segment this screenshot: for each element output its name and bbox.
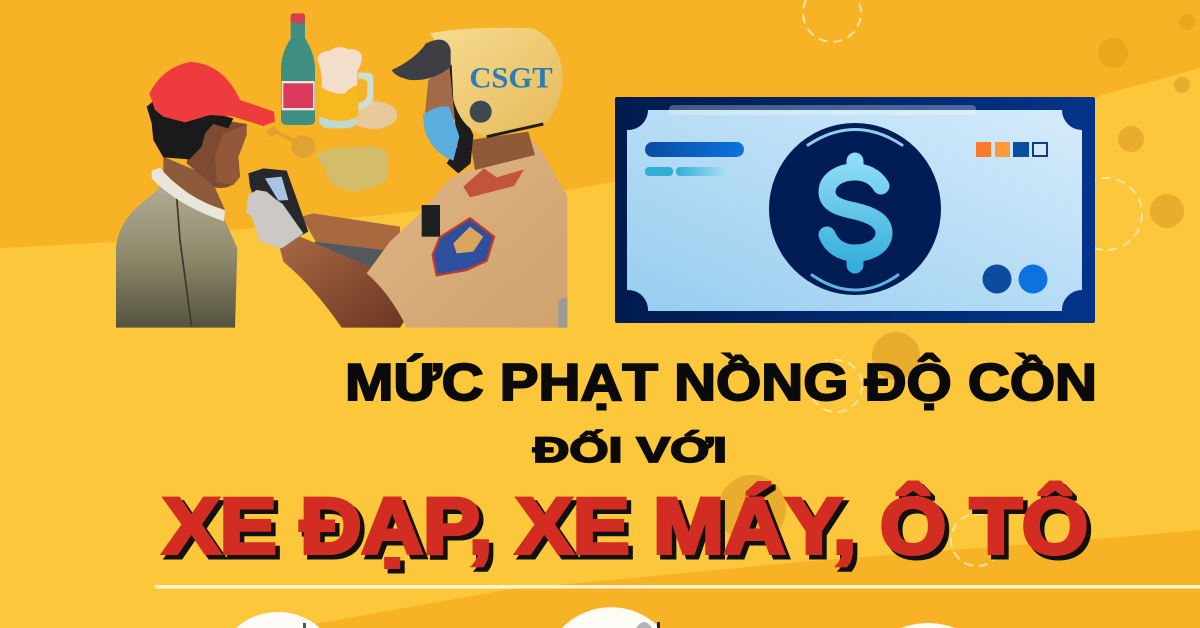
pouch [422,205,440,237]
officer [246,28,567,328]
helmet vent [470,101,492,123]
strap [447,65,473,173]
bill face [627,110,1082,311]
far arm [302,213,400,257]
neck [163,157,225,210]
mask [423,106,459,161]
driver [116,62,275,328]
color squares [976,142,1047,157]
red cap [149,62,275,126]
coin arcs [808,130,902,145]
title line 3: XE ĐẠP, XE MÁY, Ô TÔ [163,481,1088,570]
hair [147,98,233,159]
face [187,117,247,188]
coin [769,123,941,295]
badge patch [433,218,494,275]
face [425,65,462,120]
shirt [116,183,237,328]
icon: dollar symbol [827,161,884,265]
gray corner [558,297,567,328]
helmet [430,28,563,137]
collar [152,168,225,221]
bill frame [615,97,1095,323]
circles [982,264,1012,294]
visor [392,40,451,80]
vehicle icon tops [236,607,955,628]
title line 2: ĐỐI VỚI [533,430,727,470]
epaulet [463,168,524,197]
near arm [280,235,408,328]
icon: alcohol bottle [281,13,315,125]
uniform [367,140,567,328]
title line 3: XE ĐẠP, XE MÁY, Ô TÔ [167,485,1092,574]
icon: beer mug [317,47,397,129]
banknote icon [615,97,1095,323]
trousers [313,242,383,277]
decorative dots [718,0,1195,566]
title line 1: MỨC PHẠT NỒNG ĐỘ CỒN [345,353,1097,412]
glove [246,190,303,248]
text bars [645,142,744,176]
divider [155,585,1200,588]
helmet label: CSGT [469,61,553,94]
illustration: officer testing a driver for alcohol [116,13,567,328]
highlight [669,105,976,115]
lollipop shape [267,125,315,158]
neck [470,132,535,170]
breathalyzer [248,168,308,236]
blob [317,147,388,191]
